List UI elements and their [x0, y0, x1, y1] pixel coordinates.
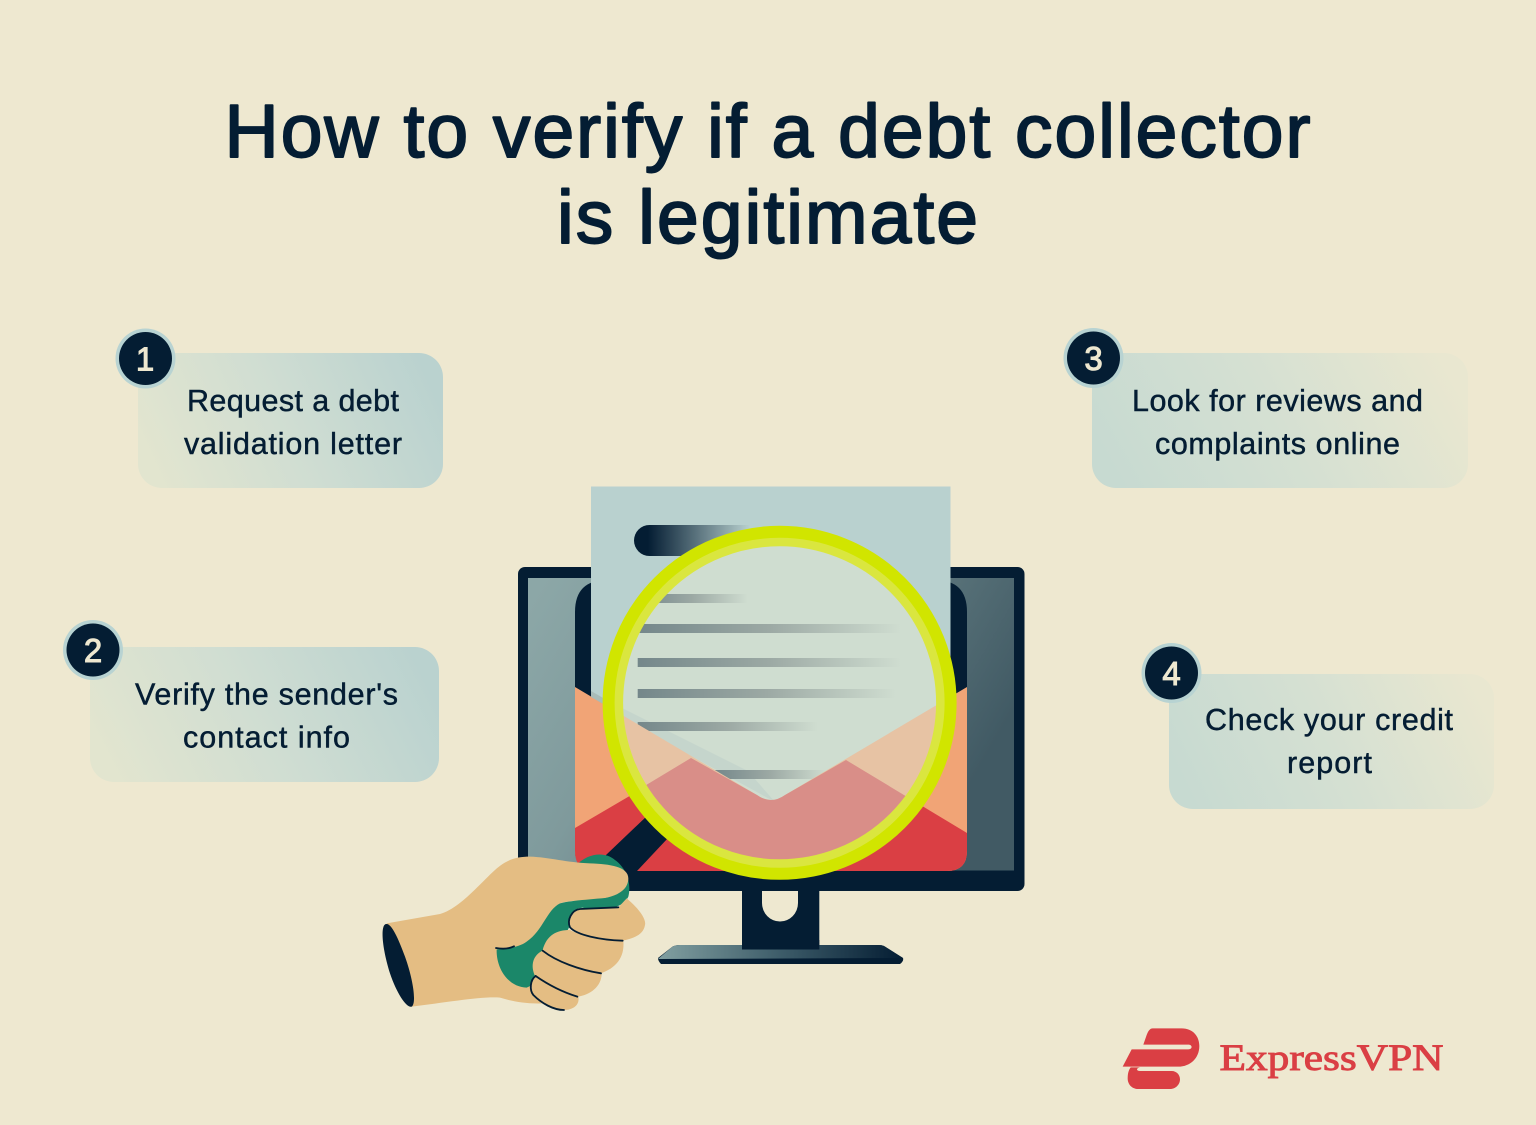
paper fold shadow	[591, 691, 605, 705]
green grip under palm	[497, 897, 623, 988]
card background	[90, 647, 439, 782]
number badge	[1142, 643, 1202, 703]
step 4	[1142, 643, 1494, 809]
card background	[138, 353, 443, 488]
title	[224, 89, 1310, 259]
magnifier ring	[609, 532, 951, 874]
title: How to verify if a debt collector	[224, 89, 1310, 173]
step text: contact info	[183, 720, 350, 754]
number badge	[63, 620, 123, 680]
title: is legitimate	[557, 175, 978, 259]
letter paper	[591, 486, 950, 800]
envelope back	[575, 580, 967, 871]
number badge: 4	[1162, 655, 1181, 692]
step text	[135, 678, 398, 754]
step text: Request a debt	[187, 384, 400, 418]
lens envelope front	[646, 758, 906, 860]
step text: report	[1287, 746, 1373, 780]
number badge	[1064, 328, 1124, 388]
step text	[1132, 384, 1423, 461]
grip top	[578, 854, 629, 908]
step text: complaints online	[1155, 427, 1400, 461]
monitor base	[658, 940, 903, 964]
monitor stand	[742, 888, 819, 945]
logo wordmark: ExpressVPN	[1220, 1038, 1444, 1079]
letter heading bar	[634, 525, 750, 556]
monitor screen	[528, 578, 1014, 870]
lens paper fold shadow	[622, 708, 775, 802]
logo mark	[1123, 1028, 1199, 1089]
illustration: monitor, envelope, magnifier and hand	[383, 486, 1024, 1010]
lens background	[623, 546, 936, 800]
number badge: 1	[136, 340, 154, 378]
step text	[1205, 703, 1454, 780]
lens paper lines	[638, 594, 901, 779]
finger outlines	[496, 907, 623, 1010]
fingers	[531, 898, 645, 1010]
step 1	[116, 328, 443, 488]
palm and thumb	[387, 857, 628, 1007]
step text: validation letter	[184, 427, 402, 461]
number badge	[116, 328, 176, 388]
sleeve opening	[383, 924, 414, 1007]
card background	[1169, 674, 1494, 809]
ExpressVPN logo	[1123, 1028, 1444, 1089]
magnifier handle	[606, 818, 667, 871]
step text: Check your credit	[1205, 703, 1454, 737]
envelope front	[575, 796, 967, 871]
card background	[1092, 353, 1468, 488]
lens envelope flaps	[624, 706, 936, 800]
envelope	[575, 580, 967, 871]
step text: Verify the sender's	[135, 678, 398, 712]
envelope flaps	[575, 687, 967, 871]
step text	[184, 384, 402, 461]
hand holding magnifier	[383, 854, 645, 1010]
number badge: 2	[84, 632, 102, 669]
monitor frame	[518, 567, 1024, 891]
number badge: 3	[1084, 340, 1103, 377]
step text: Look for reviews and	[1132, 384, 1423, 418]
step 3	[1064, 328, 1468, 488]
lens content	[623, 546, 936, 860]
step 2	[63, 620, 439, 782]
